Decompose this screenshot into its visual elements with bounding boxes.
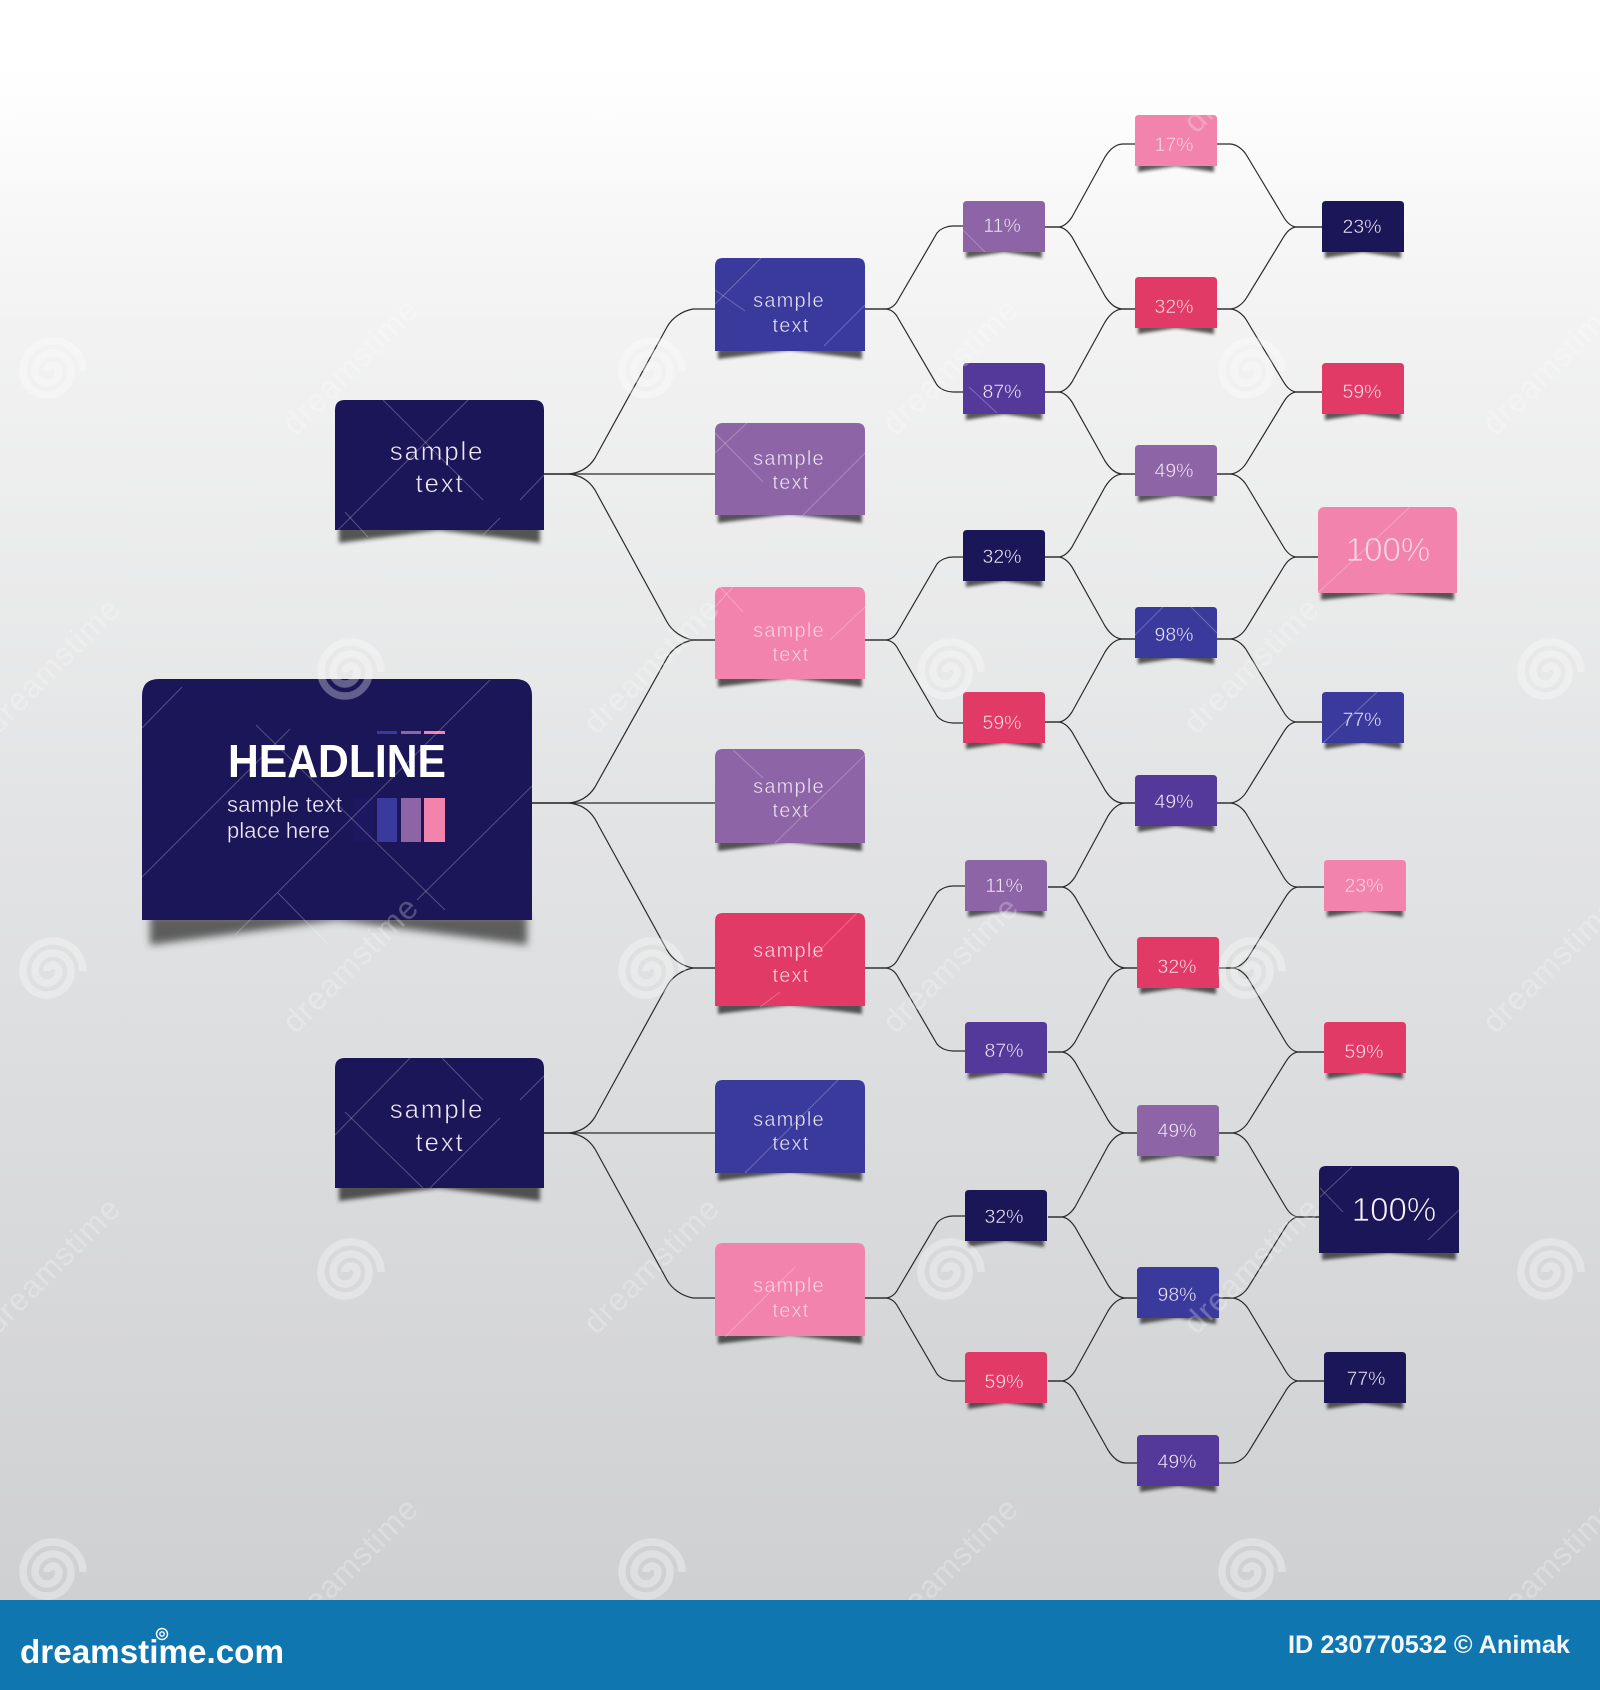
- node: 23% pink: [1324, 860, 1406, 917]
- node: 59% lower: 59%: [984, 1371, 1024, 1393]
- node: 87% lower: 87%: [984, 1040, 1024, 1062]
- node: 77% blue: 77%: [1342, 709, 1382, 731]
- watermark text: dreamstime: [576, 1190, 727, 1341]
- node: 98% col4 lower: 98%: [1157, 1284, 1197, 1306]
- node: red sample 5: [715, 913, 865, 1014]
- watermark text: dreamstime: [1176, 590, 1327, 741]
- logo spiral: [156, 1628, 168, 1640]
- node: 77% blue: [1322, 692, 1404, 749]
- node: 23% navy: 23%: [1342, 216, 1382, 238]
- node: 11% lower: 11%: [985, 875, 1023, 897]
- node: blue sample 1: text: [772, 315, 810, 337]
- node: 32% lower: [965, 1190, 1047, 1247]
- node: pink sample 7: text: [772, 1300, 810, 1322]
- node: red sample 5: sample: [753, 940, 825, 962]
- node: blue sample 1: sample: [753, 290, 825, 312]
- node: 59% col5: 59%: [1342, 381, 1382, 403]
- panel: main headline box: [142, 679, 532, 945]
- node: 100% navy: 100%: [1352, 1191, 1436, 1228]
- watermark text: dreamstime: [275, 889, 426, 1040]
- node: 32%: 32%: [982, 546, 1022, 568]
- node: 17%: [1135, 115, 1217, 172]
- node: 98% col4 lower: [1137, 1267, 1219, 1324]
- node: purple sample 4: text: [772, 800, 810, 822]
- connector lines: [532, 144, 1324, 1463]
- watermark text: dreamstime: [275, 291, 426, 442]
- watermark text: dreamstime: [1176, 1190, 1327, 1341]
- node: purple sample 4: sample: [753, 776, 825, 798]
- node: 59% col5: [1322, 363, 1404, 420]
- sample text line 1: sample text: [227, 792, 342, 817]
- node: 49% col4: [1135, 445, 1217, 502]
- watermark text: dreamstime: [275, 1490, 426, 1641]
- node: blue sample 6: [715, 1080, 865, 1181]
- node: 87%: [963, 363, 1045, 420]
- watermark text: dreamstime: [875, 291, 1026, 442]
- node: blue sample 6: text: [772, 1133, 810, 1155]
- node: 87% lower: [965, 1022, 1047, 1079]
- node: 11%: [963, 201, 1045, 258]
- node: 32%: [963, 530, 1045, 587]
- node: pink sample 3: [715, 587, 865, 687]
- node: purple sample 2: sample: [753, 448, 825, 470]
- panel: upper sample box: text: [415, 468, 465, 498]
- node: 59%: [963, 692, 1045, 749]
- panel: upper sample box: sample: [390, 436, 484, 466]
- node: 11% lower: [965, 860, 1047, 917]
- node: 32% lower: 32%: [984, 1206, 1024, 1228]
- node: pink sample 3: text: [772, 644, 810, 666]
- node: 59%: 59%: [982, 712, 1022, 734]
- node: 49% violet col4: 49%: [1154, 791, 1194, 813]
- logo text: dreamstime.com: [20, 1633, 284, 1670]
- node: 49% col4 lower: 49%: [1157, 1120, 1197, 1142]
- node: 11%: 11%: [983, 215, 1021, 237]
- node: 98% col4: [1135, 607, 1217, 664]
- node: 49% col4 lower: [1137, 1105, 1219, 1162]
- node: 32% col4: [1135, 277, 1217, 334]
- node: purple sample 4: [715, 749, 865, 851]
- node: 100% pink: 100%: [1346, 531, 1430, 568]
- node: 59% lower: [965, 1352, 1047, 1409]
- panel: upper sample box: [335, 400, 544, 543]
- node: pink sample 3: sample: [753, 620, 825, 642]
- node: 98% col4: 98%: [1154, 624, 1194, 646]
- node: 49% violet col4: [1135, 775, 1217, 832]
- panel: lower sample box: sample: [390, 1094, 484, 1124]
- node: 49% violet col4 lower: [1137, 1435, 1219, 1492]
- node: 59% col5 lower: [1324, 1022, 1406, 1079]
- node: 77% navy: [1324, 1352, 1406, 1409]
- node: blue sample 1: [715, 258, 865, 359]
- node: 100% pink: [1318, 507, 1457, 600]
- node: 32% col4 lower: 32%: [1157, 956, 1197, 978]
- node: 49% col4: 49%: [1154, 460, 1194, 482]
- node: blue sample 6: sample: [753, 1109, 825, 1131]
- node: 59% col5 lower: 59%: [1344, 1041, 1384, 1063]
- node: purple sample 2: text: [772, 472, 810, 494]
- node: pink sample 7: sample: [753, 1275, 825, 1297]
- watermark text: dreamstime: [875, 1490, 1026, 1641]
- panel: lower sample box: [335, 1058, 544, 1201]
- node: red sample 5: text: [772, 965, 810, 987]
- swatch bars: [353, 731, 445, 842]
- sample text line 2: place here: [227, 818, 330, 843]
- watermark text: dreamstime: [875, 889, 1026, 1040]
- watermark lines: [142, 230, 1459, 1337]
- watermark text: dreamstime: [576, 590, 727, 741]
- node: purple sample 2: [715, 423, 865, 523]
- node: 49% violet col4 lower: 49%: [1157, 1451, 1197, 1473]
- panel: lower sample box: text: [415, 1127, 465, 1157]
- node: 23% pink: 23%: [1344, 875, 1384, 897]
- node: pink sample 7: [715, 1243, 865, 1344]
- node: 100% navy: [1319, 1166, 1459, 1260]
- node: 23% navy: [1322, 201, 1404, 258]
- footer banner: [0, 1600, 1600, 1690]
- node: 32% col4 lower: [1137, 937, 1219, 994]
- node: 17%: 17%: [1154, 134, 1194, 156]
- image id credit: ID 230770532 © Animak: [1288, 1631, 1570, 1659]
- node: 87%: 87%: [982, 381, 1022, 403]
- node: 32% col4: 32%: [1154, 296, 1194, 318]
- node: 77% navy: 77%: [1346, 1368, 1386, 1390]
- headline: HEADLINE: [228, 735, 446, 787]
